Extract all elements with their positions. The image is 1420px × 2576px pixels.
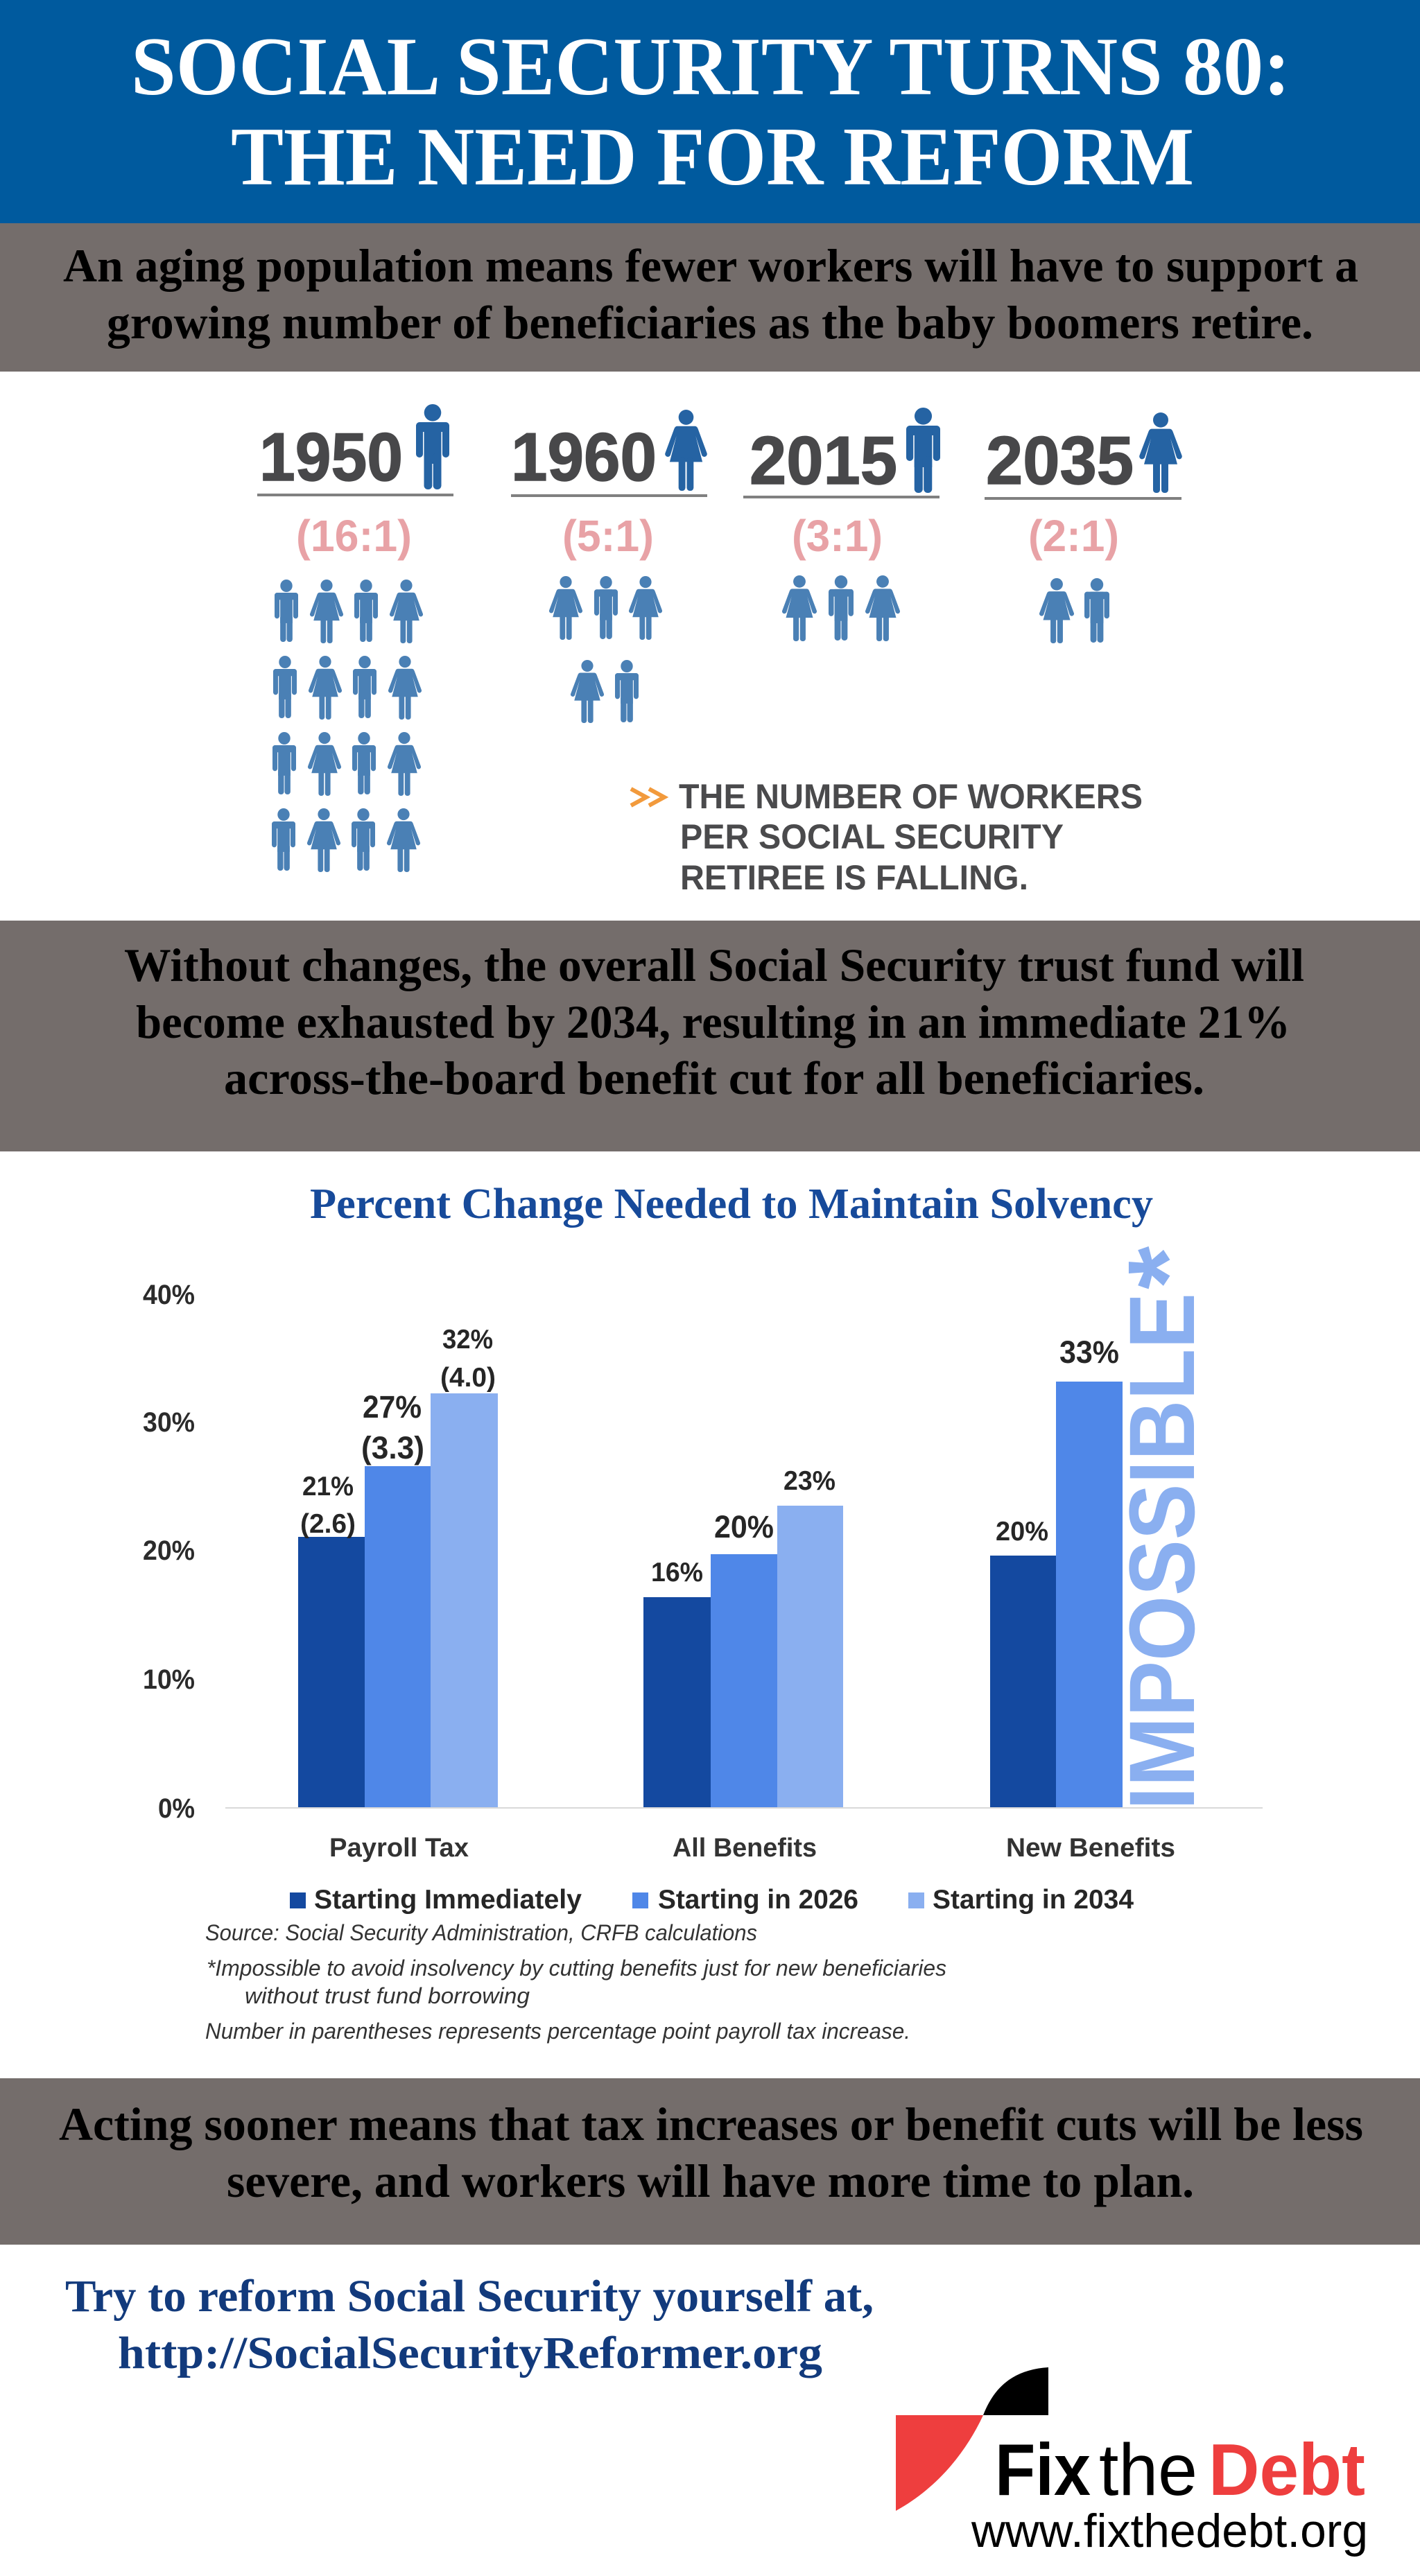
data labels: 32% bbox=[442, 1325, 493, 1355]
category labels: Payroll Tax bbox=[329, 1834, 469, 1863]
title: SOCIAL SECURITY TURNS 80: bbox=[131, 20, 1290, 112]
callout: number of workers falling: THE NUMBER OF WORKERS bbox=[679, 777, 1143, 816]
column: 1950 heading: 1950 bbox=[259, 419, 403, 495]
call to action: http://SocialSecurityReformer.org bbox=[118, 2328, 822, 2378]
legend: Starting in 2034 bbox=[933, 1885, 1134, 1915]
ratio labels: (2:1) bbox=[1028, 511, 1119, 561]
legend: Starting Immediately bbox=[314, 1885, 582, 1915]
bars: all benefits bbox=[643, 1506, 843, 1807]
y axis labels bbox=[143, 1280, 195, 1824]
logo: Fix the Debt bbox=[896, 2367, 1368, 2557]
data labels: 27% bbox=[363, 1389, 422, 1425]
category labels: All Benefits bbox=[673, 1834, 817, 1863]
ratio labels: (3:1) bbox=[792, 511, 883, 561]
panel: workers per retiree pictogram bbox=[257, 404, 1182, 897]
title bbox=[131, 20, 1290, 202]
panel: aging population statement: growing number of beneficiaries as the baby boomers retire. bbox=[107, 296, 1313, 349]
arrow: orange chevrons bbox=[631, 789, 664, 806]
title: THE NEED FOR REFORM bbox=[231, 110, 1194, 202]
icon: logo swoosh bbox=[896, 2367, 1048, 2511]
ratio labels bbox=[296, 511, 1119, 561]
column: 1950 heading bbox=[257, 404, 453, 496]
ratio labels: (5:1) bbox=[562, 511, 654, 561]
column: 1960 heading: 1960 bbox=[511, 419, 657, 495]
chart title: Percent Change Needed to Maintain Solvency bbox=[310, 1181, 1153, 1228]
y axis labels: 10% bbox=[143, 1664, 195, 1695]
legend: Starting in 2026 bbox=[658, 1885, 858, 1915]
data labels: 20% bbox=[996, 1517, 1048, 1547]
data labels: 33% bbox=[1059, 1334, 1119, 1370]
y axis labels: 40% bbox=[143, 1280, 195, 1310]
call to action bbox=[65, 2271, 874, 2378]
bars: payroll tax bbox=[298, 1393, 498, 1807]
y axis labels: 30% bbox=[143, 1407, 195, 1438]
panel: trust fund exhaustion statement bbox=[0, 921, 1420, 1151]
data labels: 20% bbox=[714, 1509, 774, 1544]
impossible vertical label: * bbox=[1105, 1246, 1229, 1289]
data labels: 16% bbox=[651, 1558, 703, 1587]
footnotes: without trust fund borrowing bbox=[245, 1983, 530, 2008]
ratio labels: (16:1) bbox=[296, 511, 412, 561]
data labels: 23% bbox=[783, 1466, 835, 1496]
column: 2015 heading: 2015 bbox=[750, 422, 897, 498]
panel: aging population statement bbox=[0, 223, 1420, 372]
data labels: (2.6) bbox=[300, 1509, 356, 1539]
column: 2035 heading bbox=[985, 412, 1182, 500]
column: 2035 heading: 2035 bbox=[986, 422, 1134, 498]
icons: 2015 three workers bbox=[782, 575, 900, 641]
panel: solvency bar chart bbox=[143, 1181, 1263, 2044]
column: 1960 heading bbox=[511, 410, 707, 497]
panel: acting sooner statement: Acting sooner means that tax increases or benefit cuts will be less bbox=[59, 2098, 1363, 2150]
call to action: Try to reform Social Security yourself at, bbox=[65, 2271, 874, 2322]
logo wordmark: Fix bbox=[995, 2429, 1091, 2511]
icons: 2035 two workers bbox=[1039, 578, 1109, 643]
logo wordmark: Debt bbox=[1209, 2429, 1365, 2511]
legend bbox=[290, 1885, 1134, 1915]
logo wordmark bbox=[995, 2429, 1365, 2511]
footnotes bbox=[205, 1920, 946, 2044]
data labels: (3.3) bbox=[361, 1430, 424, 1465]
bars: new benefits bbox=[990, 1382, 1123, 1807]
data labels bbox=[300, 1325, 1119, 1587]
y axis labels: 0% bbox=[158, 1793, 195, 1824]
panel: trust fund exhaustion statement: become exhausted by 2034, resulting in an immediate 21% bbox=[136, 995, 1290, 1048]
icons: 1950 sixteen workers bbox=[272, 580, 423, 872]
logo wordmark: the bbox=[1099, 2429, 1197, 2511]
panel: trust fund exhaustion statement: Without changes, the overall Social Security trust fund will bbox=[124, 939, 1304, 991]
category labels: New Benefits bbox=[1006, 1834, 1175, 1863]
category labels bbox=[329, 1834, 1175, 1863]
y axis labels: 20% bbox=[143, 1535, 195, 1566]
impossible vertical label: IMPOSSIBLE bbox=[1111, 1293, 1214, 1810]
data labels: (4.0) bbox=[440, 1363, 496, 1393]
data labels: 21% bbox=[302, 1472, 354, 1502]
column: 2015 heading bbox=[743, 408, 940, 498]
panel: aging population statement: An aging population means fewer workers will have to support a bbox=[63, 239, 1358, 292]
footnotes: Source: Social Security Administration, CRFB calculations bbox=[205, 1920, 757, 1945]
footnotes: Number in parentheses represents percentage point payroll tax increase. bbox=[205, 2019, 910, 2044]
panel: trust fund exhaustion statement: across-the-board benefit cut for all beneficiaries. bbox=[224, 1052, 1204, 1104]
logo url: www.fixthedebt.org bbox=[971, 2505, 1368, 2557]
panel: acting sooner statement bbox=[0, 2078, 1420, 2245]
icons: 1960 five workers bbox=[549, 576, 662, 723]
panel: acting sooner statement: severe, and workers will have more time to plan. bbox=[227, 2155, 1194, 2207]
header banner bbox=[0, 0, 1420, 223]
callout: number of workers falling: PER SOCIAL SECURITY bbox=[680, 817, 1064, 856]
callout: number of workers falling: RETIREE IS FALLING. bbox=[680, 858, 1028, 897]
callout: number of workers falling bbox=[631, 777, 1143, 897]
footnotes: *Impossible to avoid insolvency by cutting benefits just for new beneficiaries bbox=[207, 1956, 946, 1981]
